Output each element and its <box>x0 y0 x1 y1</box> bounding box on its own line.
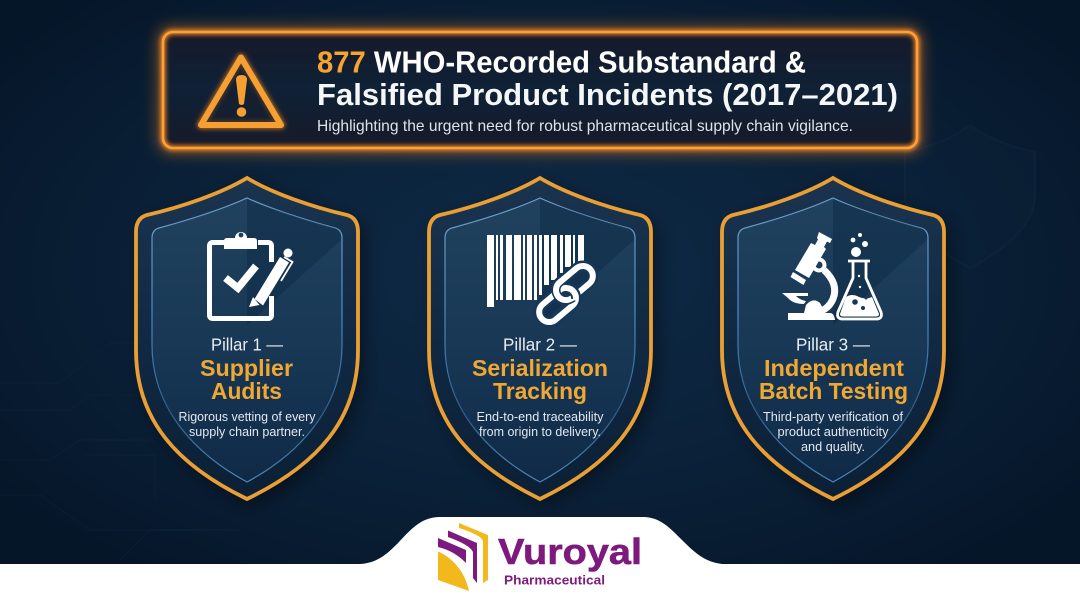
pillar 2 description <box>476 409 604 439</box>
pillar 3 title: Independent <box>764 355 904 381</box>
panel: pillar 1 shield <box>136 178 364 505</box>
pillar 2 title: Tracking <box>493 378 587 404</box>
banner heading: 877 WHO-Recorded Substandard & <box>317 44 806 80</box>
pillar 3 label: Pillar 3 — <box>796 334 870 354</box>
pillar 2 label: Pillar 2 — <box>503 334 577 354</box>
icon: clipboard with check and pen <box>210 232 292 318</box>
icon: microscope <box>782 232 835 320</box>
icon: warning triangle <box>201 58 281 125</box>
pillar 1 label: Pillar 1 — <box>211 334 283 354</box>
banner subtitle: Highlighting the urgent need for robust pharmaceutical supply chain vigilance. <box>317 118 853 135</box>
panel: pillar 2 shield <box>429 178 657 505</box>
pillar 3 description: Third-party verification of <box>763 409 903 424</box>
footer white band <box>0 517 1080 603</box>
banner heading: Falsified Product Incidents (2017–2021) <box>317 77 898 112</box>
faint watermark shield <box>905 125 1035 268</box>
icon: logo mark <box>438 523 488 591</box>
pillar 2 description: from origin to delivery. <box>479 424 601 439</box>
brand subtitle: Pharmaceutical <box>504 574 605 588</box>
circuit traces <box>0 343 240 560</box>
brand name: Vuroyal <box>498 531 642 572</box>
pillar 1 description <box>178 409 316 439</box>
banner heading <box>317 44 898 112</box>
icon: flask with bubbles <box>838 233 881 319</box>
pillar 3 description: product authenticity <box>778 424 889 439</box>
pillar 3 description: and quality. <box>801 439 865 454</box>
pillar 3 title <box>759 355 908 404</box>
pillar 3 description <box>763 409 903 454</box>
pillar 1 description: Rigorous vetting of every <box>178 409 316 424</box>
alert banner <box>162 31 918 149</box>
pillar 1 title: Audits <box>211 378 282 404</box>
pillar 2 description: End-to-end traceability <box>476 409 604 424</box>
pillar 1 description: supply chain partner. <box>189 424 305 439</box>
icon: barcode with chain link <box>487 235 601 326</box>
pillar 1 title: Supplier <box>200 355 293 381</box>
pillar 1 title <box>200 355 293 404</box>
pillar 2 title: Serialization <box>472 355 608 381</box>
panel: pillar 3 shield <box>722 178 950 505</box>
pillar 2 title <box>472 355 608 404</box>
logo: Vuroyal Pharmaceutical <box>438 523 642 591</box>
pillar 3 title: Batch Testing <box>759 378 908 404</box>
